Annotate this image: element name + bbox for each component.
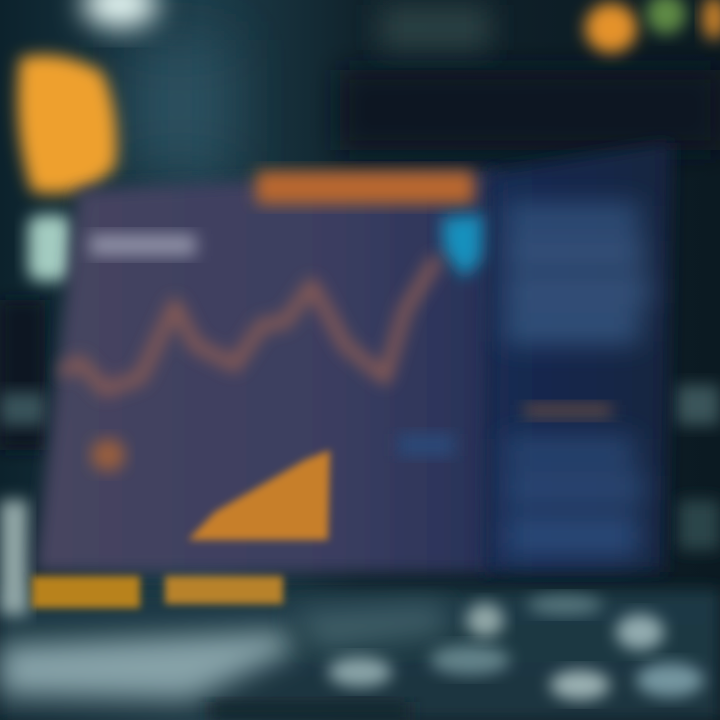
line chart xyxy=(65,262,435,390)
panel: main chart area xyxy=(35,170,495,572)
ceiling light xyxy=(82,0,158,28)
icon: orange dot xyxy=(91,439,125,471)
panel: right sidebar xyxy=(485,142,672,572)
footer bars xyxy=(32,576,283,608)
area chart: orange wedge xyxy=(188,450,330,540)
text block: sidebar upper xyxy=(505,205,650,342)
icon: cyan marker xyxy=(442,214,483,278)
label: chart title xyxy=(90,234,196,256)
text block: sidebar lower xyxy=(505,438,645,557)
label: sidebar orange heading xyxy=(524,404,612,418)
orange window glow, left xyxy=(18,55,117,193)
desk with blurred keyboard xyxy=(0,500,720,720)
pale green light, left xyxy=(28,215,72,281)
heading bar xyxy=(256,171,474,204)
top-right lights xyxy=(585,0,720,53)
panel: dashboard screen xyxy=(32,142,672,608)
label: mid-panel faint text xyxy=(398,434,454,456)
